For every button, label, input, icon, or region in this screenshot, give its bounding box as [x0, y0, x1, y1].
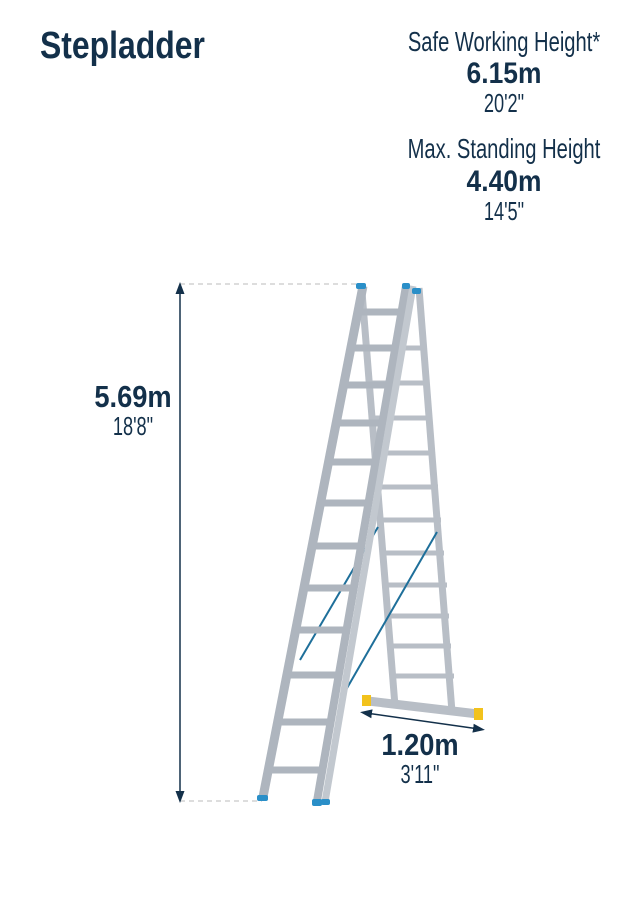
- max standing height label: Max. Standing Height: [408, 133, 600, 164]
- height dimension label: [94, 379, 172, 441]
- height dimension label: 5.69m: [94, 379, 172, 414]
- stabilizer bar: [362, 695, 483, 720]
- width arrow: [366, 713, 479, 729]
- height arrow: [180, 284, 362, 801]
- specs block: [408, 26, 600, 226]
- width dimension label: [381, 727, 459, 789]
- width dimension label: 1.20m: [381, 727, 459, 762]
- max standing height value: 4.40m: [467, 165, 541, 198]
- back ladder: [362, 288, 454, 712]
- title: Stepladder: [40, 25, 205, 67]
- safe working height imperial: 20'2": [484, 88, 524, 118]
- max standing height imperial: 14'5": [484, 196, 524, 226]
- safe working height value: 6.15m: [467, 57, 541, 90]
- ladder feet and caps: [257, 283, 421, 806]
- safe working height label: Safe Working Height*: [408, 26, 600, 57]
- width dimension label: 3'11": [401, 759, 439, 789]
- height dimension label: 18'8": [113, 411, 153, 441]
- front ladder: [263, 286, 413, 802]
- blue ropes: [300, 527, 437, 695]
